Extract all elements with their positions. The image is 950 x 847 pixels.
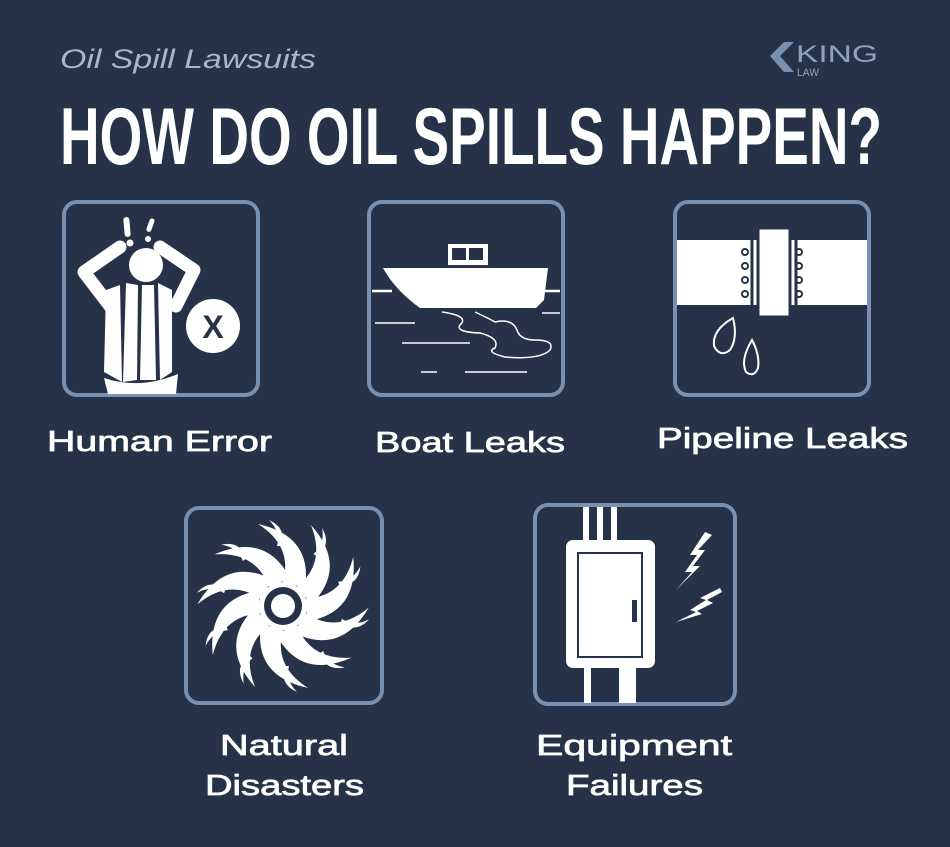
label: boat leaks: Boat Leaks bbox=[375, 427, 565, 459]
label: equipment failures bbox=[536, 730, 732, 802]
subtitle: Oil Spill Lawsuits bbox=[60, 44, 316, 74]
logo bbox=[770, 41, 878, 79]
icon: electrical panel bbox=[566, 507, 722, 703]
label: natural disasters: Natural bbox=[220, 730, 348, 762]
label: human error: Human Error bbox=[47, 426, 272, 458]
panel: boat leaks bbox=[369, 202, 563, 395]
icon: stressed person: X bbox=[202, 309, 224, 345]
icon: hurricane bbox=[193, 520, 373, 692]
panel: human error bbox=[64, 202, 258, 395]
logo: LAW bbox=[797, 67, 820, 79]
label: pipeline leaks: Pipeline Leaks bbox=[657, 423, 908, 455]
panel: equipment failures bbox=[535, 505, 735, 704]
label: natural disasters: Disasters bbox=[205, 770, 364, 802]
icon: stressed person bbox=[84, 217, 240, 394]
label: equipment failures: Equipment bbox=[536, 730, 732, 762]
panel: natural disasters bbox=[186, 508, 382, 703]
icon: leaking pipe bbox=[677, 228, 867, 374]
panel: pipeline leaks bbox=[675, 202, 869, 395]
label: equipment failures: Failures bbox=[566, 770, 703, 802]
logo: KING bbox=[796, 41, 878, 68]
label: natural disasters bbox=[205, 730, 364, 802]
icon: boat with oil bbox=[372, 244, 560, 372]
